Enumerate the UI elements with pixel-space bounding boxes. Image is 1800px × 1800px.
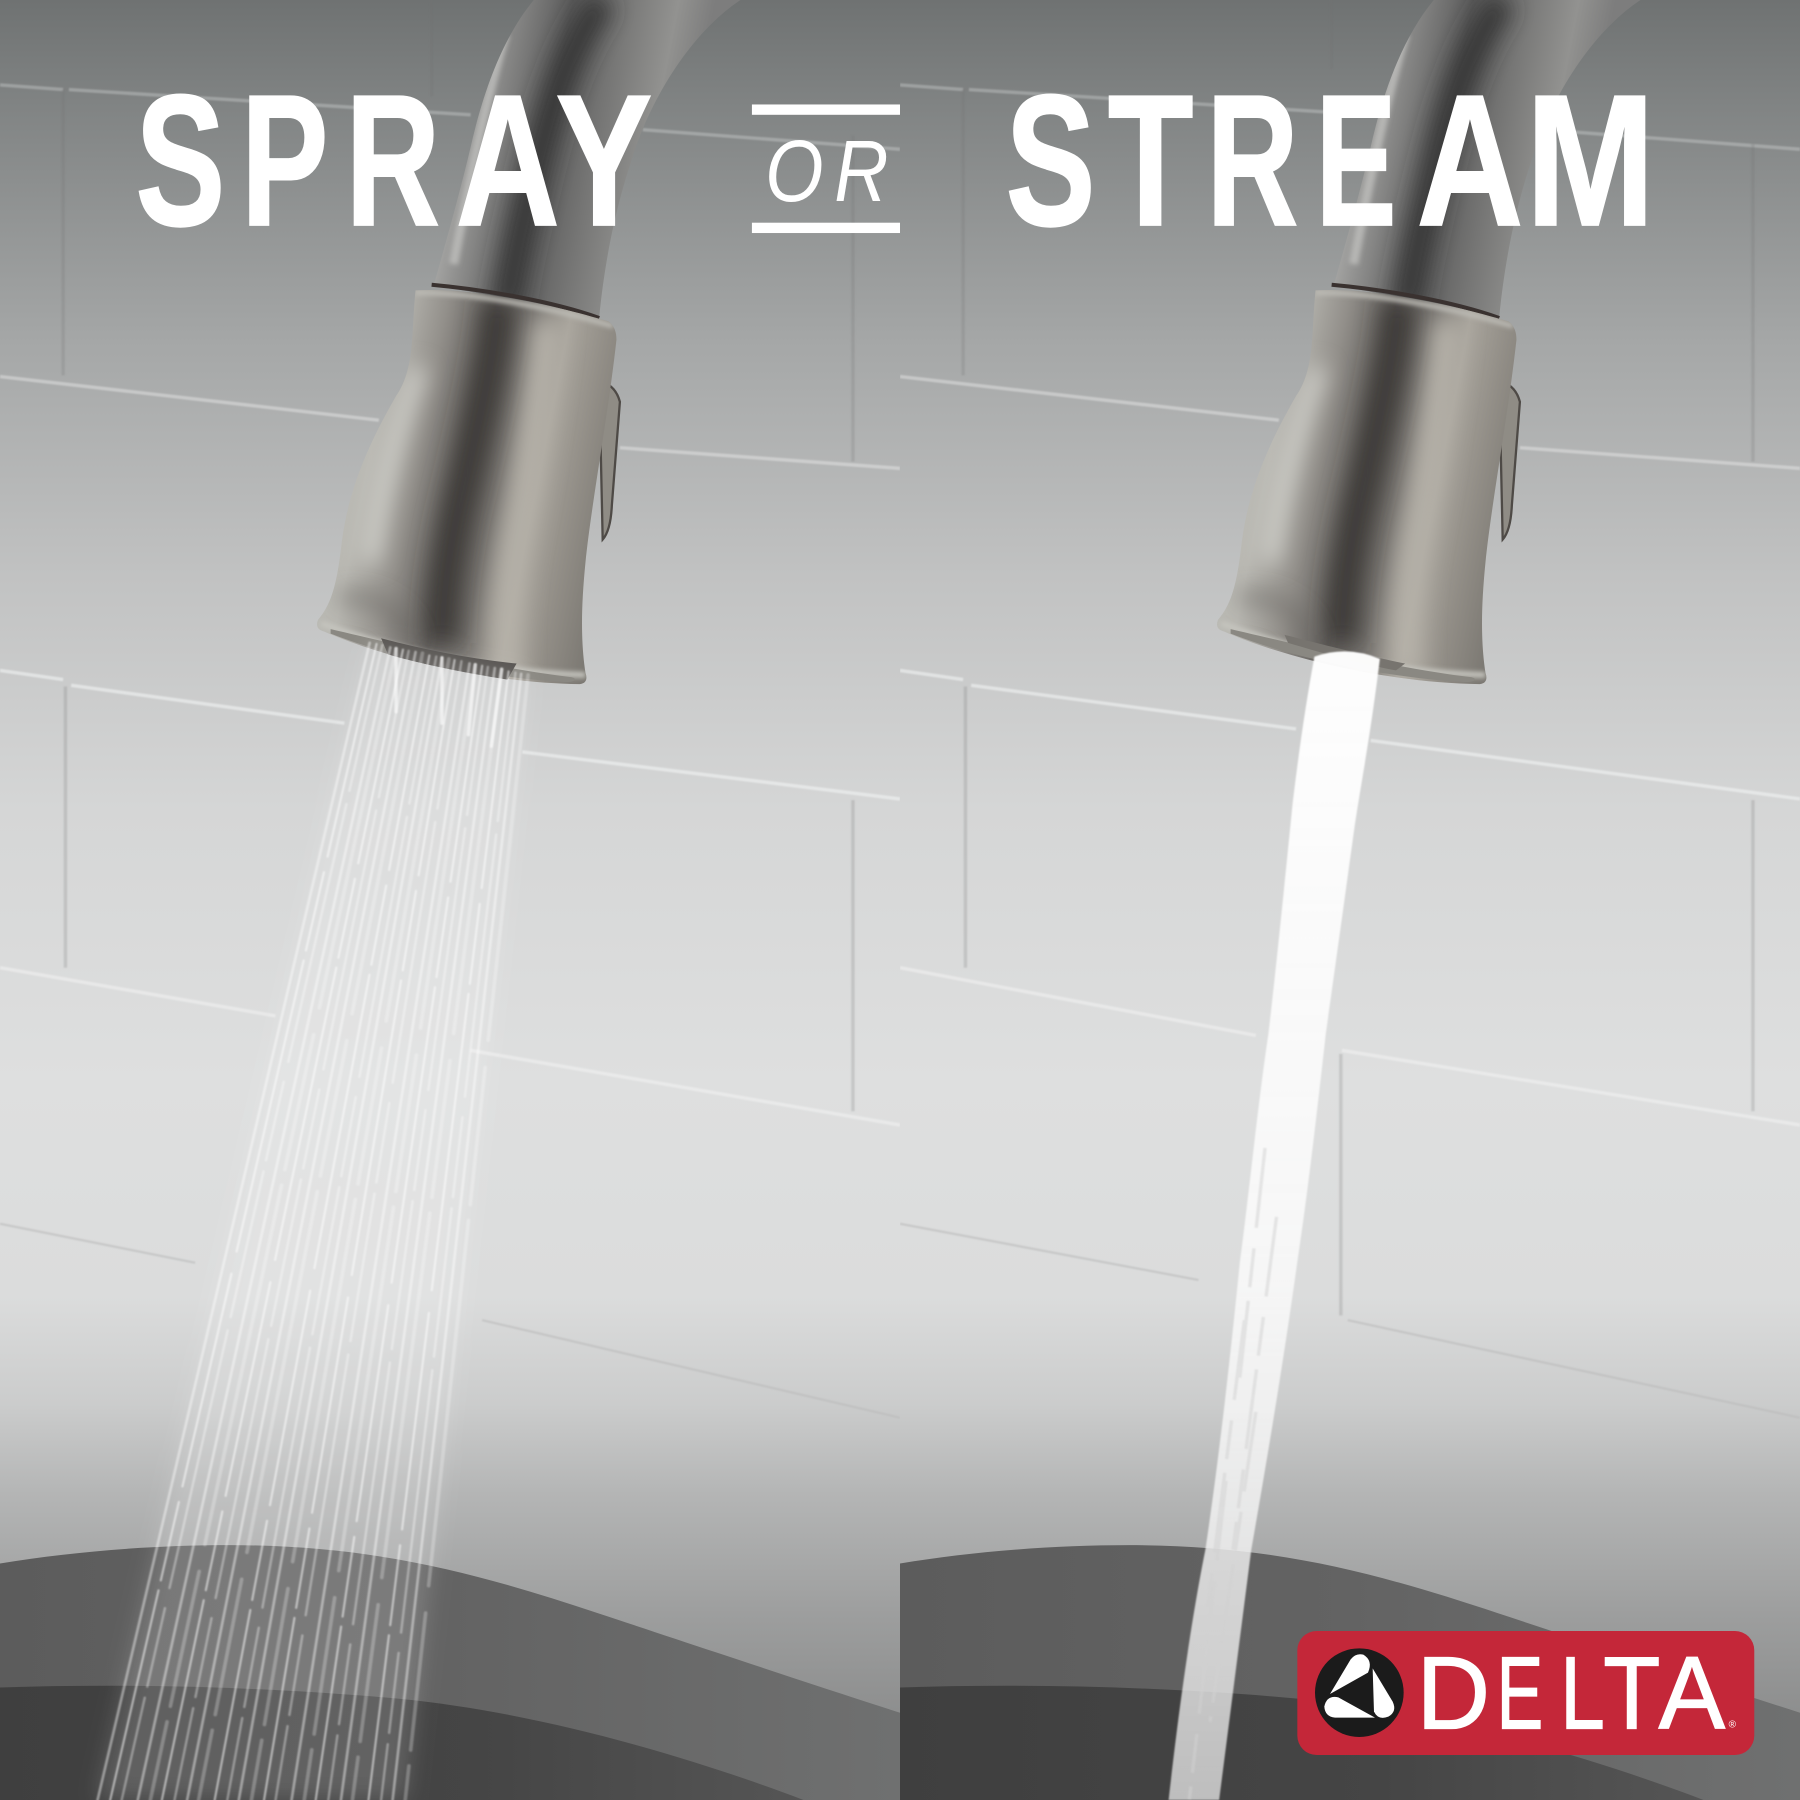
wordmark: ® [1729,1720,1737,1731]
title word: STREAM: T [1108,56,1194,266]
wall background [0,0,900,1800]
faucet stream head [1217,0,1640,684]
title word: SPRAY [135,55,652,266]
title word: STREAM: M [1526,56,1655,265]
tile grout lines [0,85,900,1418]
wordmark [1417,1635,1737,1751]
stream water [1169,651,1380,1800]
sink basin rim [900,1545,1800,1800]
icon: Delta triangle mark [1315,1648,1404,1737]
connector: OR: OR [765,123,888,220]
title word: SPRAY: R [346,57,440,266]
title word: STREAM: E [1316,56,1396,265]
stream nozzle face [1285,635,1405,670]
faucet sprayer head [317,0,740,684]
panel: spray (left half) [0,0,900,1800]
sink basin rim [0,1545,900,1800]
wordmark: D [1417,1636,1490,1750]
sink basin interior [900,1686,1704,1800]
connector: OR [752,104,900,233]
wordmark: E [1497,1636,1543,1751]
title word: STREAM: A [1417,55,1523,265]
wordmark: A [1659,1636,1726,1751]
title word: SPRAY: P [241,57,328,266]
wordmark: T [1603,1635,1660,1750]
spray nozzle face [381,638,517,680]
title word: SPRAY: A [456,57,560,265]
tile grout lines [900,85,1800,1418]
title word: STREAM: R [1207,55,1298,265]
sink basin interior [0,1686,804,1800]
title word: SPRAY: Y [556,56,652,265]
title word: STREAM [1006,55,1655,266]
panel: stream (right half) [900,0,1800,1800]
logo: Delta [1297,1631,1754,1755]
wall background [900,0,1800,1800]
wordmark: L [1560,1636,1605,1751]
title word: STREAM: S [1006,55,1095,265]
title word: SPRAY: S [135,55,225,265]
spray water [98,643,528,1800]
